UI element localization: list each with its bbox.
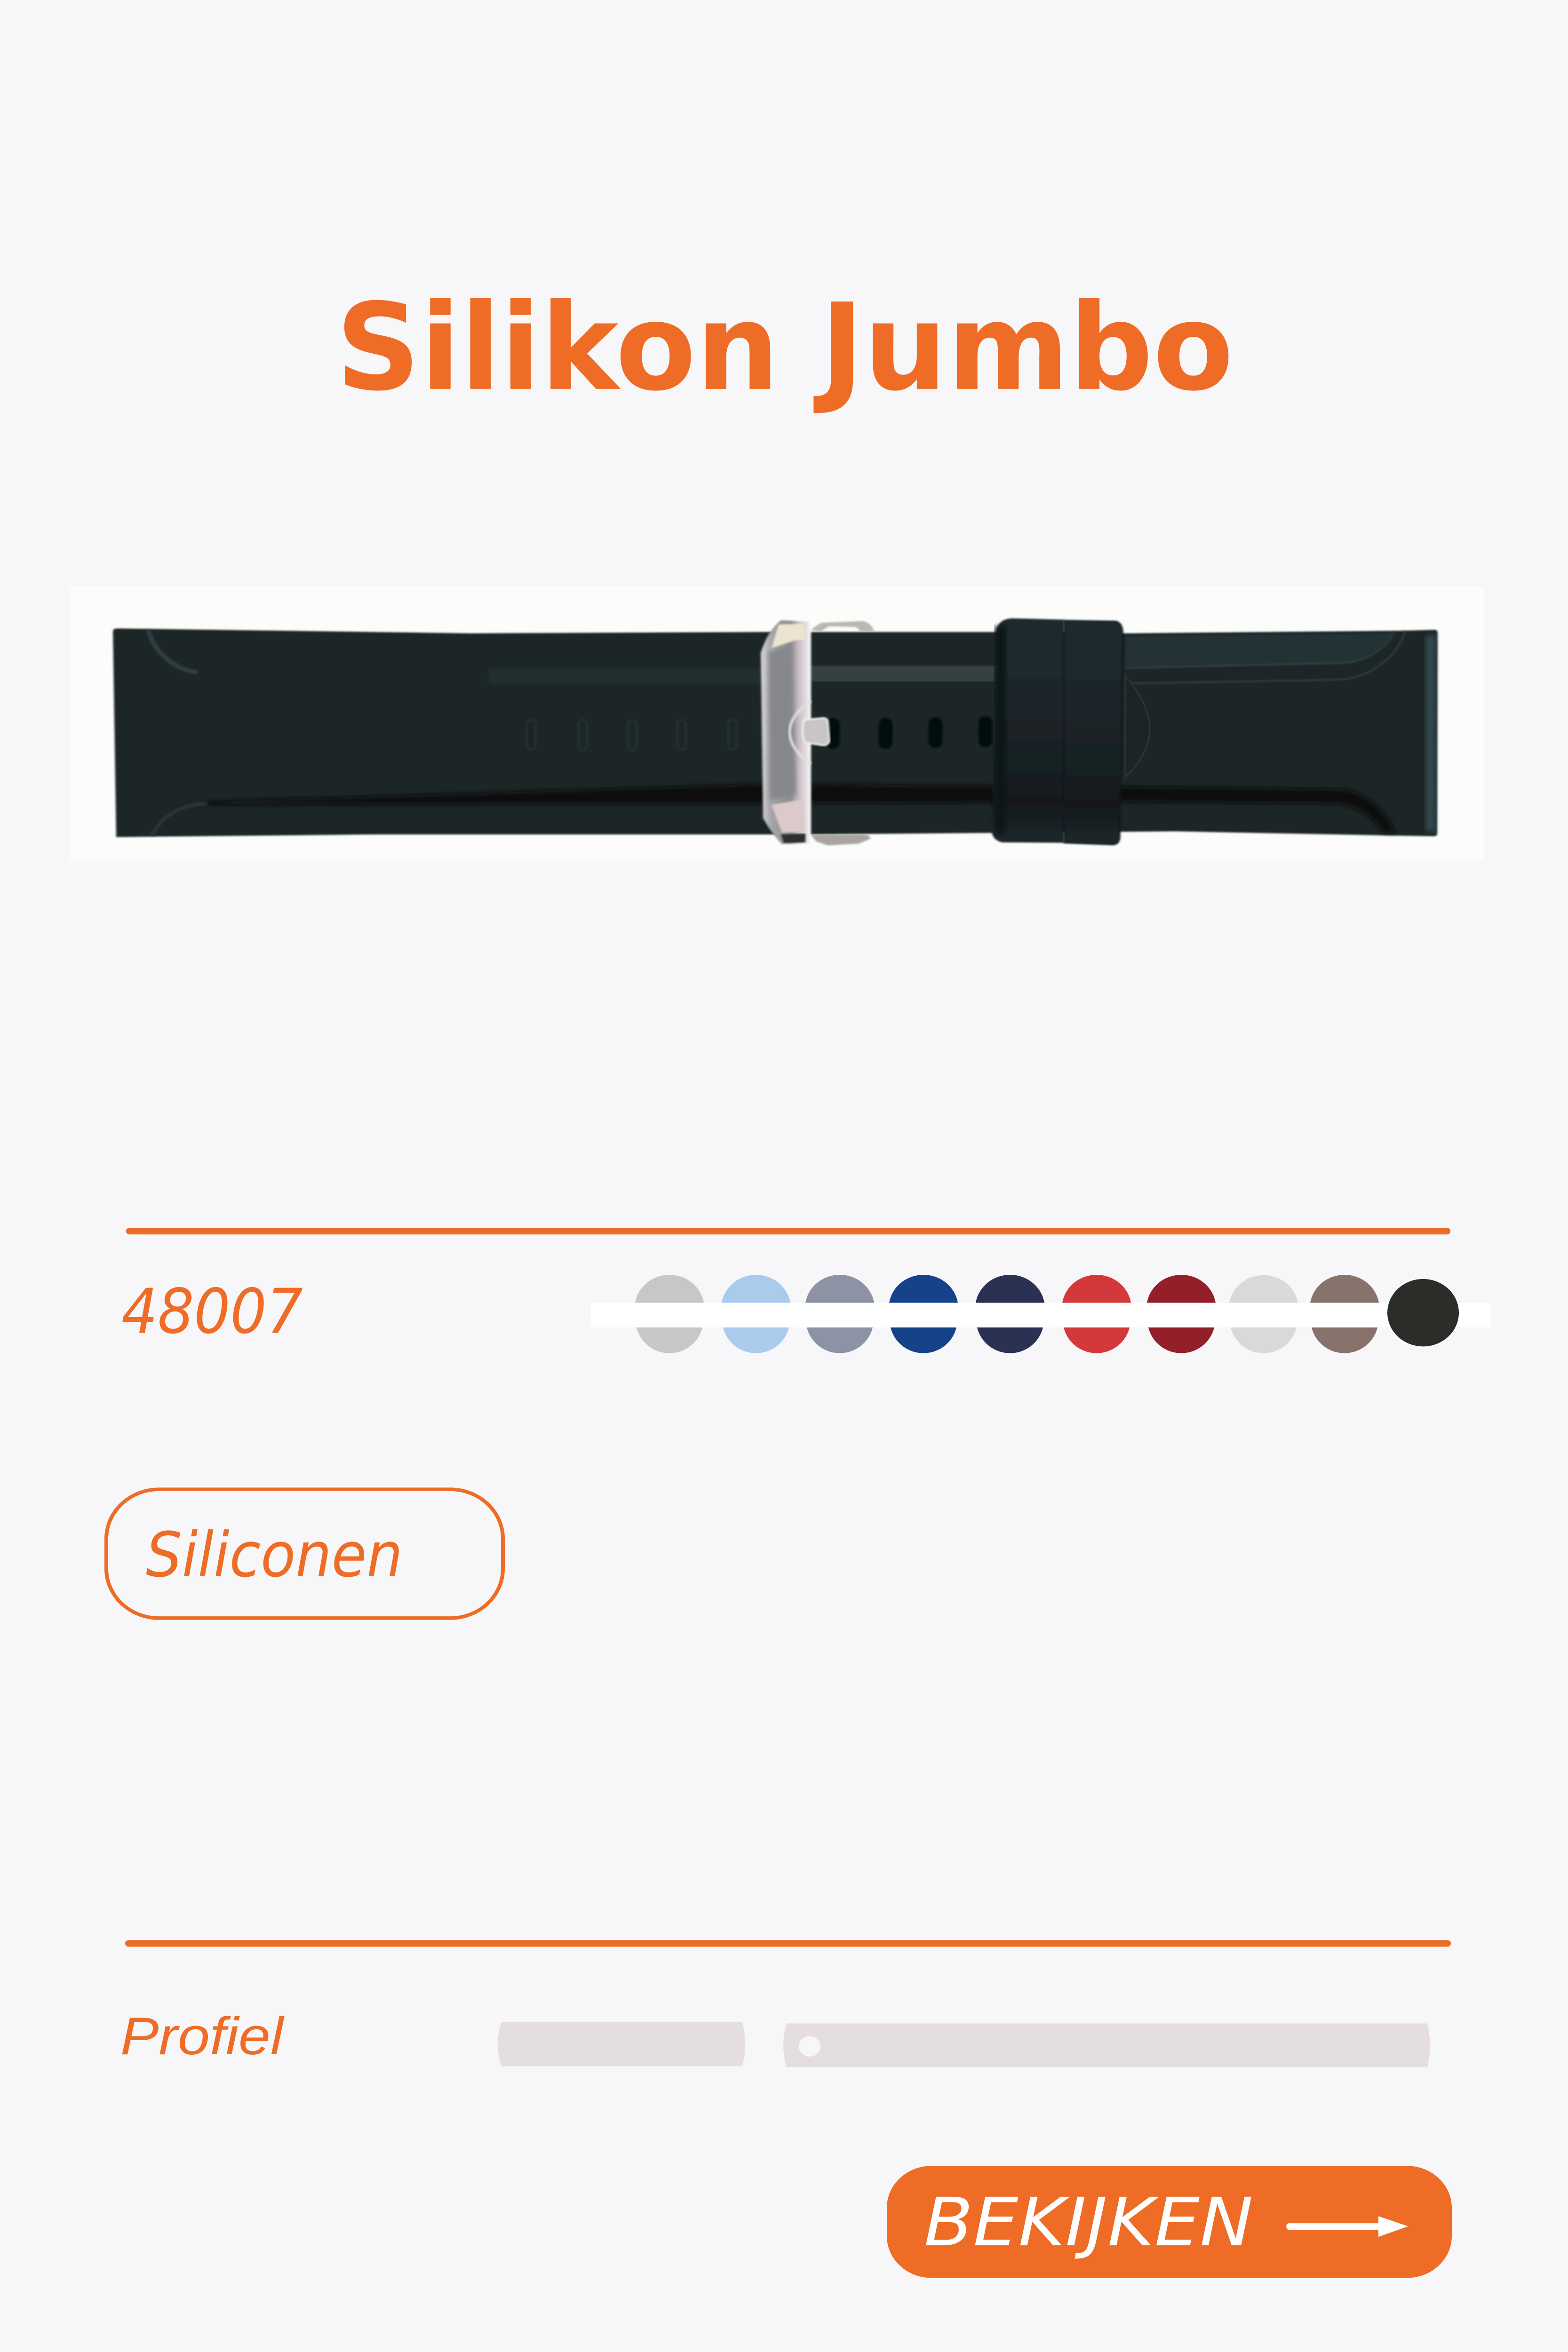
swatch: blue grey [805, 1275, 874, 1353]
buckle top hook [811, 621, 874, 632]
buckle inner reflection [769, 645, 796, 801]
title: Silikon Jumbo [336, 278, 1234, 418]
swatch: navy [976, 1275, 1044, 1353]
buckle bottom hook [811, 834, 870, 845]
swatch: black [1387, 1279, 1459, 1346]
faint strap holes [527, 720, 737, 750]
icon: arrow [1286, 2216, 1408, 2237]
swatch: royal blue [889, 1275, 958, 1353]
colour swatches [591, 1275, 1491, 1353]
strap dark lower band [207, 784, 1395, 834]
strap upper right raised panel [1125, 633, 1393, 668]
strap body [113, 628, 1438, 837]
button shape [887, 2166, 1452, 2278]
profile hole [799, 2036, 820, 2057]
profile short segment [498, 2022, 745, 2066]
photo background [71, 587, 1484, 861]
strap lower left groove [151, 803, 207, 836]
swatch: red [1062, 1275, 1131, 1353]
strap upper band faint left [489, 668, 762, 684]
tag outline [106, 1489, 503, 1618]
strap right end cap highlight [1425, 635, 1436, 831]
white strip behind swatches [591, 1303, 1491, 1327]
button label: BEKIJKEN [924, 2184, 1253, 2261]
buckle top highlight [772, 624, 806, 648]
strap upper left groove [148, 630, 198, 673]
strap right groove lines [1125, 631, 1405, 683]
swatch: taupe [1310, 1275, 1379, 1353]
buckle prong base [789, 701, 811, 764]
strap upper band [811, 666, 999, 682]
profile diagram [498, 2022, 1430, 2067]
buckle bottom dark edge [781, 834, 805, 843]
swatch: light grey [635, 1275, 704, 1353]
panel: product photo of watch strap [71, 587, 1484, 861]
keeper loop 2 [1064, 620, 1122, 844]
keeper loop 1 [992, 618, 1064, 843]
swatch: dark red [1147, 1275, 1216, 1353]
material tag [106, 1489, 503, 1618]
button: bekijken [887, 2166, 1452, 2278]
divider line top [126, 1228, 1450, 1234]
article number: 48007 [121, 1276, 303, 1348]
tail arc beyond keeper [1125, 675, 1150, 777]
keeper shadow [995, 626, 1006, 834]
buckle frame [761, 620, 811, 844]
buckle lower shine [772, 799, 804, 833]
tag label: Siliconen [146, 1519, 403, 1591]
swatch: pale grey [1229, 1275, 1298, 1353]
dark strap holes [826, 716, 992, 749]
divider line bottom [125, 1940, 1451, 1947]
buckle prong [802, 718, 829, 745]
swatch: light blue [722, 1275, 790, 1353]
profile label: Profiel [120, 2007, 285, 2066]
profile long segment [783, 2024, 1430, 2067]
